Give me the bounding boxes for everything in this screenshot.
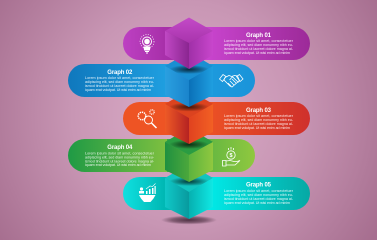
text block: graph 03: adipiscing elit, sed diam nonummy nibh eu- (224, 118, 294, 122)
text block: graph 01: iquam erat volutpat. Ut wisi enim ad minim (224, 51, 290, 55)
shadow on cube 2 (170, 66, 208, 74)
heading: graph 05: Graph 05 (246, 182, 272, 188)
floor shadow (161, 216, 217, 224)
text block: graph 05: ismod tincidunt ut laoreet dolore magna al- (224, 197, 294, 201)
text block: graph 01 (224, 39, 294, 55)
text block: graph 03: ismod tincidunt ut laoreet dolore magna al- (224, 122, 294, 126)
icon: handshake (220, 74, 243, 87)
text block: graph 05: iquam erat volutpat. Ut wisi enim ad minim (224, 201, 290, 205)
text block: graph 05 (224, 189, 294, 205)
text block: graph 03 (224, 114, 294, 130)
text block: graph 05: Lorem ipsum dolor sit amet, consectetuer (224, 189, 294, 193)
text block: graph 02: Lorem ipsum dolor sit amet, consectetuer (85, 76, 155, 80)
icon: hand with dollar coin (222, 147, 240, 166)
shadow on cube 4 (170, 140, 208, 148)
panel: graph 03 (123, 102, 310, 135)
icon: hand with dollar coin: $ (229, 153, 233, 159)
text block: graph 01: ismod tincidunt ut laoreet dolore magna al- (224, 47, 294, 51)
text block: graph 01: Lorem ipsum dolor sit amet, consectetuer (224, 39, 294, 43)
text block: graph 04: adipiscing elit, sed diam nonummy nibh eu- (85, 156, 155, 160)
icon: gears and magnifier (138, 110, 156, 128)
heading: graph 02: Graph 02 (107, 70, 133, 76)
text block: graph 03: iquam erat volutpat. Ut wisi enim ad minim (224, 126, 290, 130)
cube 2 (165, 60, 212, 107)
panel: graph 02 (68, 64, 255, 97)
text block: graph 03: Lorem ipsum dolor sit amet, consectetuer (224, 114, 294, 118)
text block: graph 05: adipiscing elit, sed diam nonummy nibh eu- (224, 193, 294, 197)
heading: graph 01: Graph 01 (246, 33, 272, 39)
cube 3 (166, 99, 213, 144)
text block: graph 04: iquam erat volutpat. Ut wisi enim ad minim (85, 163, 151, 167)
heading: graph 03: Graph 03 (246, 108, 272, 114)
text block: graph 04: Lorem ipsum dolor sit amet, consectetuer (85, 152, 155, 156)
icon: light bulb with gear (140, 34, 154, 53)
heading: graph 04: Graph 04 (107, 145, 133, 151)
shadow on cube 5 (170, 178, 208, 186)
cube 1 (165, 18, 213, 69)
text block: graph 04 (85, 152, 155, 167)
text block: graph 02: ismod tincidunt ut laoreet dolore magna al- (85, 84, 155, 88)
text block: graph 02 (85, 76, 155, 92)
cube 5 (165, 174, 213, 219)
shadow on cube 3 (170, 103, 208, 112)
panel: graph 01 (123, 27, 310, 60)
cube 4 (165, 136, 213, 182)
text block: graph 04: ismod tincidunt ut laoreet dolore magna al- (85, 160, 155, 164)
text block: graph 02: iquam erat volutpat. Ut wisi enim ad minim (85, 88, 151, 92)
panel: graph 04 (68, 139, 255, 172)
text block: graph 01: adipiscing elit, sed diam nonummy nibh eu- (224, 43, 294, 47)
text block: graph 02: adipiscing elit, sed diam nonummy nibh eu- (85, 80, 155, 84)
icon: chart, person and gear (139, 184, 156, 202)
panel: graph 05 (123, 177, 310, 210)
